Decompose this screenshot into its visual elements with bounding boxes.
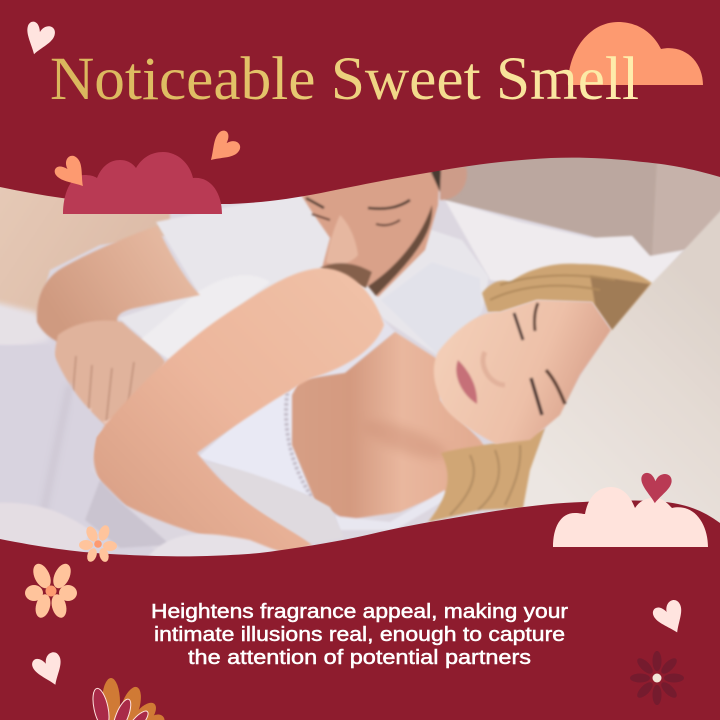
- title: Noticeable Sweet Smell: [50, 46, 639, 113]
- bedsheet folds: [0, 345, 344, 560]
- bottom wave band: [0, 500, 720, 720]
- description text: the attention of potential partners: [188, 647, 531, 669]
- cloud: peach top right: [568, 22, 703, 85]
- woman's hair: [428, 264, 652, 522]
- heart: rose on cloud: [640, 472, 672, 504]
- heart: orange left: [52, 153, 93, 195]
- description text: Heightens fragrance appeal, making your: [151, 601, 568, 623]
- man's arm: [37, 226, 200, 342]
- man's shirt: [119, 190, 489, 360]
- man's face: [298, 165, 467, 297]
- woman's face: [434, 300, 611, 444]
- man's hand: [54, 321, 165, 428]
- big pillow: [523, 190, 720, 530]
- woman's chest and neck: [292, 332, 492, 530]
- description text: [151, 601, 568, 669]
- heart: white top left: [21, 20, 57, 58]
- flower: dark bottom right: [630, 651, 684, 705]
- top wave band: [0, 0, 720, 206]
- flower: orange and rose bottom: [90, 678, 167, 720]
- woman's arm: [94, 268, 384, 552]
- photo: couple in bed: [0, 140, 720, 570]
- heart: orange centre: [201, 128, 243, 170]
- flower: peach small: [79, 524, 117, 563]
- heart: white bottom right: [651, 598, 690, 638]
- cloud: rose left: [63, 152, 222, 214]
- flower: peach large: [25, 561, 77, 619]
- cloud: pale pink bottom right: [553, 487, 708, 547]
- description text: intimate illusions real, enough to capture: [154, 624, 565, 646]
- woman's top: [198, 316, 395, 497]
- heart: white bottom left: [30, 650, 69, 690]
